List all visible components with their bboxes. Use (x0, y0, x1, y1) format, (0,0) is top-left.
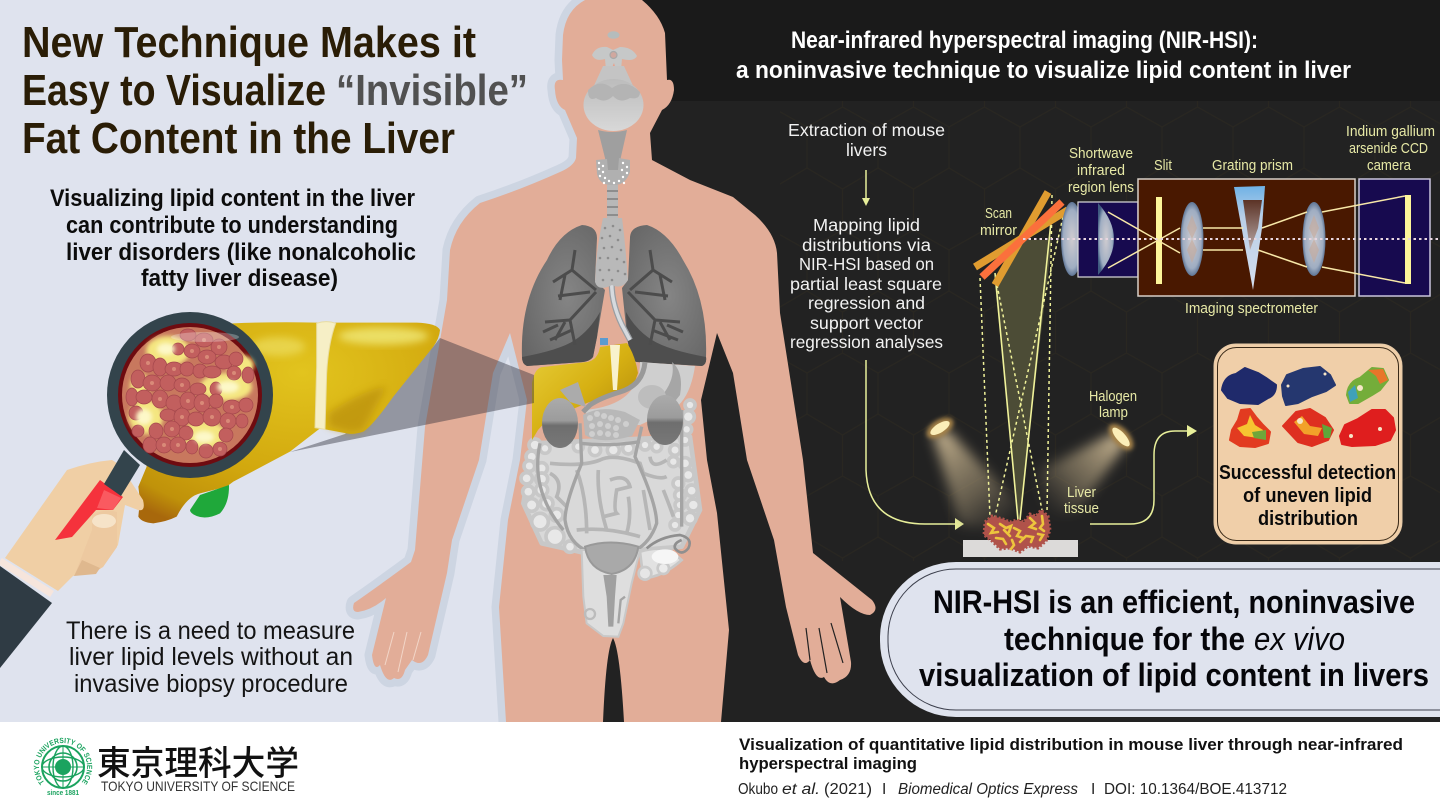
citation: Biomedical Optics Express (898, 781, 1078, 798)
thymus and tube (595, 218, 630, 340)
optics labels: Indium gallium (1346, 124, 1435, 140)
optics labels: Scan (985, 206, 1012, 222)
optics labels: region lens (1068, 180, 1134, 196)
heading: NIR-HSI (736, 27, 1351, 84)
logo emblem: since 1881 (47, 790, 79, 797)
shadow beam linking liver to body (290, 338, 534, 452)
optics labels: mirror (980, 223, 1017, 239)
bright fat highlights (136, 343, 239, 443)
text: mapping lipid distributions: Mapping lipid (813, 215, 920, 235)
title: Easy to Visualize (22, 66, 326, 115)
detector (1405, 195, 1411, 284)
citation: Visualization of quantitative lipid distribution in mouse liver through near-infrared (739, 735, 1403, 754)
callout: conclusion: ex vivo (1254, 621, 1345, 657)
citation (738, 735, 1403, 798)
stomach (585, 362, 695, 425)
optics labels: infrared (1077, 163, 1125, 179)
diagram: imaging optics (923, 124, 1440, 557)
falciform ligament (315, 322, 336, 429)
lenses (1180, 202, 1326, 276)
liver cells (126, 329, 254, 458)
icon: magnifier handle (104, 450, 140, 496)
spectrometer box (1138, 179, 1355, 296)
optics labels: camera (1367, 158, 1412, 174)
citation: I (1091, 781, 1095, 798)
slit (1156, 197, 1162, 284)
lens box (1078, 202, 1138, 277)
ureters and vessels (538, 410, 682, 552)
thyroid (596, 158, 630, 185)
optics labels: Slit (1154, 158, 1172, 174)
micro fat patches (129, 336, 254, 449)
result text: distribution (1258, 508, 1358, 530)
text: extraction of mouse livers: Extraction of mouse (788, 120, 945, 140)
title: “Invisible” (336, 66, 528, 115)
text block: lipid content: liver disorders (like nonalcoholic (66, 239, 416, 266)
text: mapping lipid distributions: distributions via (802, 235, 931, 255)
objective lens (1061, 202, 1083, 276)
citation: DOI: 10.1364/BOE.413712 (1104, 781, 1287, 798)
abdominal organs (521, 400, 700, 637)
trachea (607, 185, 618, 221)
small liver in body (532, 338, 645, 440)
text block: lipid content (50, 185, 416, 292)
magnifying glass lens (107, 312, 273, 478)
camera box (1359, 179, 1430, 296)
background: dark right half with hexagon pattern (600, 0, 1440, 722)
hand holding magnifier (0, 450, 144, 668)
logo: Tokyo University of Science: TOKYO UNIVERSITY OF SCIENCE (101, 778, 295, 794)
arrow: mapping to liver tissue (866, 360, 964, 530)
scan cone (995, 240, 1052, 520)
heading: NIR-HSI: a noninvasive technique to visualize lipid content in liver (736, 57, 1351, 84)
background: light left half (0, 0, 600, 722)
lens gloss (171, 332, 239, 342)
optics labels: Liver (1067, 485, 1096, 501)
text: mapping lipid distributions: regression analyses (790, 332, 943, 352)
callout: conclusion: technique for the (1004, 621, 1245, 657)
lamps (923, 413, 1138, 454)
pancreas (583, 409, 640, 440)
liver tissue sample (984, 510, 1050, 552)
logo wordmark: 東京理科大学 (97, 745, 299, 783)
human body silhouette (353, 0, 876, 722)
title: Fat Content in the Liver (22, 114, 455, 163)
text: mapping lipid distributions: regression and (808, 293, 925, 313)
halogen lamp beams (932, 430, 1126, 530)
text: mapping lipid distributions (790, 215, 943, 352)
text: mapping lipid distributions: partial least square (790, 274, 942, 294)
text block: need for noninvasive measure: There is a need to measure (66, 617, 355, 645)
optics labels: Imaging spectrometer (1185, 301, 1318, 317)
icon: thumb (75, 511, 117, 574)
prism (1234, 186, 1265, 290)
heading: NIR-HSI: Near-infrared hyperspectral imaging (NIR-HSI): (791, 27, 1258, 54)
result text (1219, 462, 1396, 530)
text block: need for noninvasive measure: liver lipid levels without an (69, 643, 353, 671)
optics labels: Shortwave (1069, 146, 1133, 162)
citation: I (882, 781, 886, 798)
light paths (980, 195, 1063, 520)
icon: hand (5, 460, 144, 591)
logo emblem: TOKYO UNIVERSITY OF SCIENCE (34, 738, 92, 786)
ovary cluster (639, 535, 690, 580)
citation: Okubo (738, 781, 778, 798)
icon: shirt cuff (0, 561, 52, 594)
bladder and lower organs (582, 542, 640, 637)
optics labels: lamp (1099, 405, 1128, 421)
head and neck organs (584, 31, 644, 170)
citation: (2021) (824, 781, 872, 798)
footer band (0, 722, 1440, 810)
result text: of uneven lipid (1243, 485, 1372, 507)
icon: sleeve (0, 566, 52, 668)
gallbladder (190, 485, 229, 517)
text block: need for noninvasive measure (66, 617, 355, 698)
citation: et al. (782, 781, 820, 798)
arrow: liver tissue to results (1090, 425, 1197, 524)
text: extraction of mouse livers: livers (846, 140, 887, 160)
result text: Successful detection (1219, 462, 1396, 484)
optics labels: Grating prism (1212, 158, 1293, 174)
optics labels (980, 124, 1435, 517)
optics labels: Halogen (1089, 389, 1137, 405)
icon: red handle (55, 480, 123, 540)
optics labels: tissue (1064, 501, 1099, 517)
text: mapping lipid distributions: NIR-HSI based on (799, 254, 934, 274)
rays (1108, 196, 1405, 283)
text block: lipid content: can contribute to understanding (66, 212, 398, 239)
citation: hyperspectral imaging (739, 754, 917, 773)
title: New Technique Makes it (22, 18, 476, 67)
text block: lipid content: fatty liver disease) (141, 265, 338, 292)
kidneys (542, 395, 683, 448)
text: extraction of mouse livers (788, 120, 945, 160)
text block: need for noninvasive measure: invasive biopsy procedure (74, 670, 348, 698)
stage (963, 540, 1078, 557)
optics labels: arsenide CCD (1349, 141, 1428, 157)
optical axis (1023, 238, 1440, 240)
title (22, 18, 528, 163)
callout: conclusion (880, 562, 1440, 717)
panel: successful detection (1214, 344, 1402, 544)
enlarged liver (133, 322, 440, 523)
arrow: extraction to mapping (862, 170, 870, 206)
scan mirror (975, 192, 1068, 285)
text: mapping lipid distributions: support vector (810, 313, 923, 333)
intestines (521, 400, 700, 553)
text block: lipid content: Visualizing lipid content in the liver (50, 185, 415, 212)
lungs (522, 225, 706, 366)
cell nuclei (146, 338, 236, 451)
logo: Tokyo University of Science (34, 738, 299, 797)
lipid maps (1222, 367, 1395, 447)
